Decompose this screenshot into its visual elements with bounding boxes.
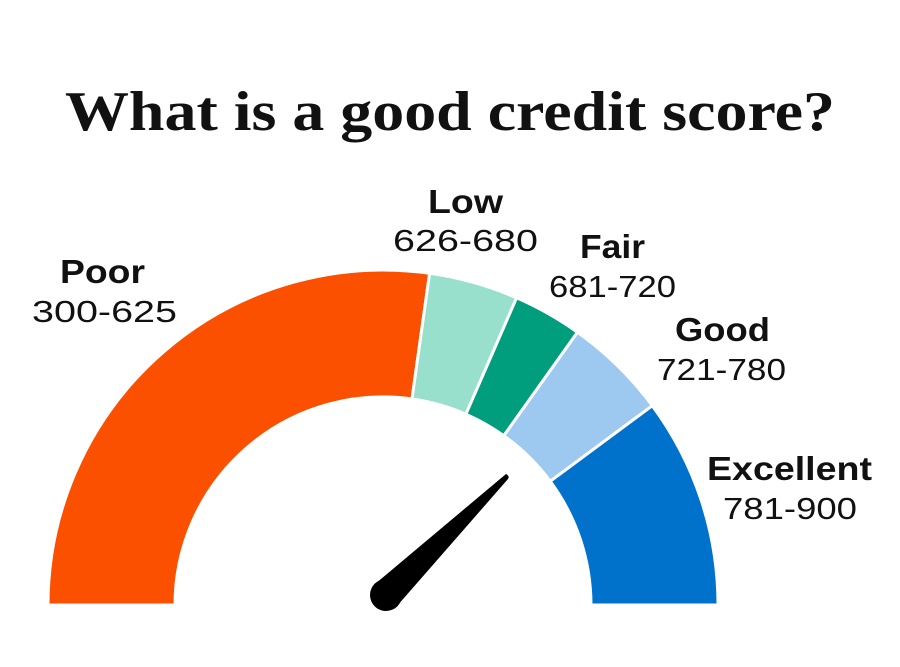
label: poor — [32, 253, 177, 329]
title: What is a good credit score? — [65, 81, 835, 143]
segment: good — [504, 332, 652, 481]
label: excellent — [707, 450, 872, 526]
label: low — [393, 183, 538, 258]
label: fair — [549, 228, 676, 304]
gauge — [48, 270, 718, 605]
segment: fair — [466, 298, 578, 436]
label: good — [657, 311, 786, 387]
label: good: 721-780 — [657, 352, 786, 387]
label: excellent: 781-900 — [723, 491, 857, 526]
label: low: Low — [428, 183, 503, 220]
needle — [370, 474, 509, 611]
label: excellent: Excellent — [707, 450, 872, 487]
label: good: Good — [675, 311, 770, 348]
label: fair: 681-720 — [549, 269, 676, 304]
label: poor: Poor — [60, 253, 145, 290]
segment: excellent — [550, 406, 718, 605]
label: low: 626-680 — [393, 223, 538, 258]
label: poor: 300-625 — [32, 294, 177, 329]
segment: low — [412, 273, 517, 414]
label: fair: Fair — [580, 228, 645, 265]
segment: poor — [48, 270, 430, 605]
